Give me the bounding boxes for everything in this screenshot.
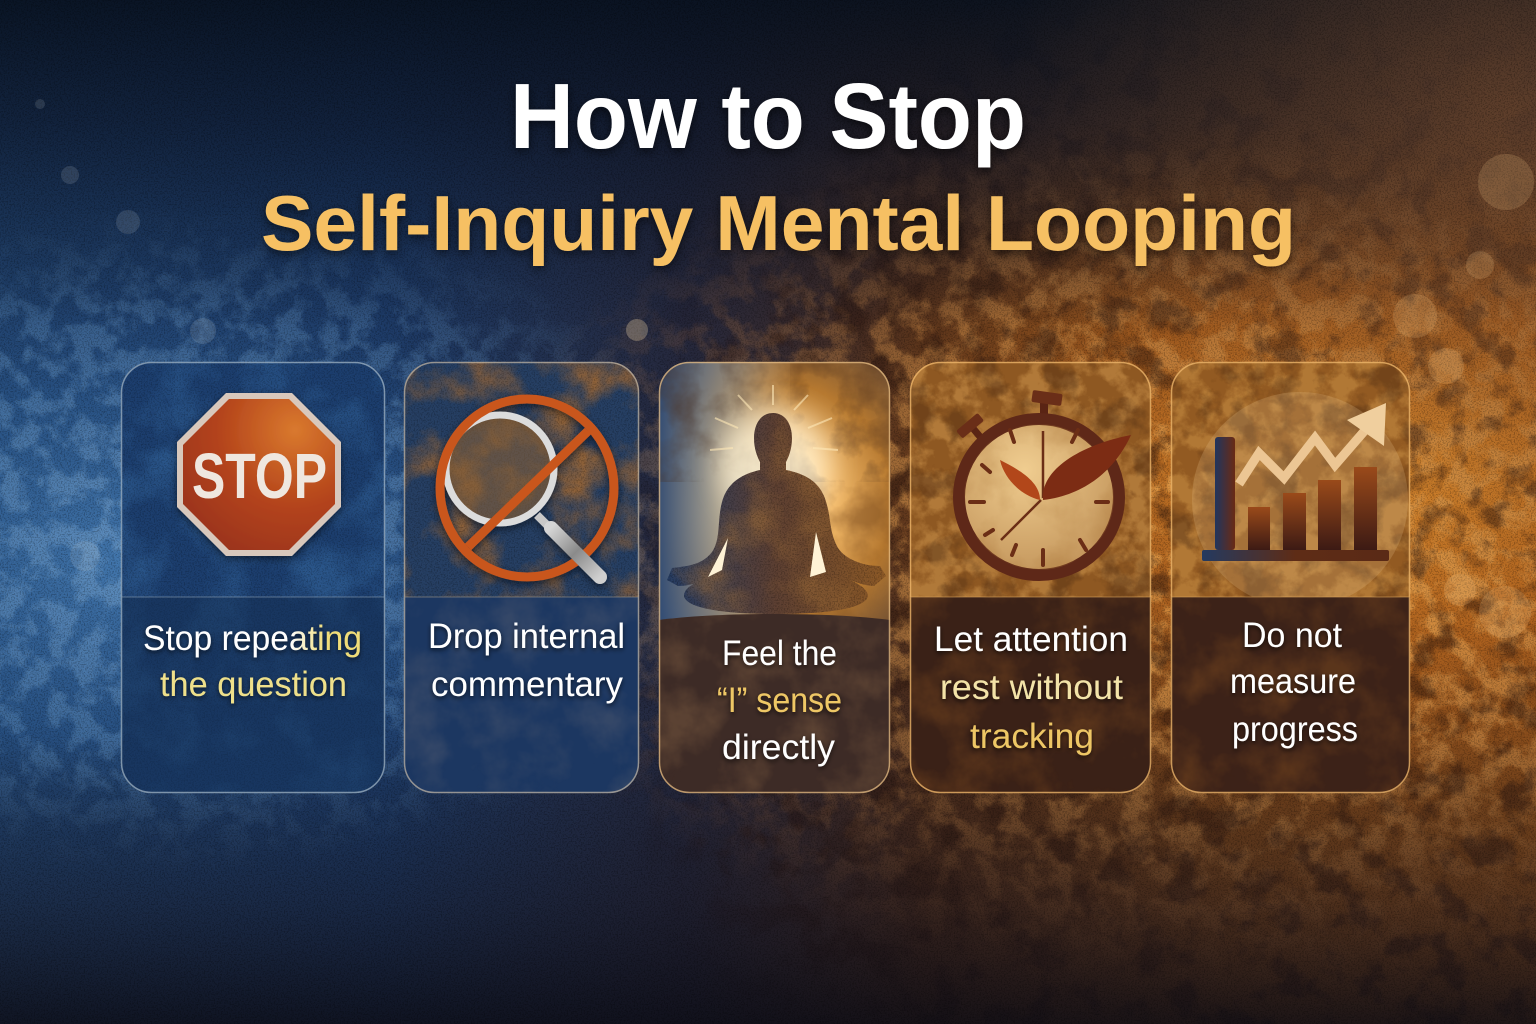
caption: feel the I sense directly: “I” sense xyxy=(717,681,842,720)
title xyxy=(261,64,1296,267)
caption: stop repeating the question: the question xyxy=(160,665,347,704)
caption: do not measure progress: Do not xyxy=(1242,616,1342,655)
caption: let attention rest without tracking: Let attention xyxy=(934,620,1128,659)
icon: crossed-out magnifying glass xyxy=(440,399,614,577)
caption: stop repeating the question xyxy=(143,619,362,704)
icon: meditating figure with rays xyxy=(660,385,890,620)
caption: let attention rest without tracking xyxy=(934,620,1128,756)
icon: stop sign xyxy=(177,393,341,556)
panel: do not measure progress xyxy=(1171,362,1410,793)
icon: stopwatch xyxy=(956,390,1131,575)
caption: feel the I sense directly: Feel the xyxy=(722,634,837,673)
caption: do not measure progress: progress xyxy=(1232,710,1358,749)
title line 1: How to Stop xyxy=(510,64,1026,168)
caption: stop repeating the question: Stop repeating xyxy=(143,619,362,658)
panel: drop internal commentary xyxy=(404,362,639,793)
caption: let attention rest without tracking: rest without xyxy=(940,668,1123,707)
caption: feel the I sense directly xyxy=(717,634,842,767)
stop sign label: STOP xyxy=(192,440,327,512)
title line 2: Self-Inquiry Mental Looping xyxy=(261,179,1296,267)
caption: drop internal commentary: Drop internal xyxy=(428,617,625,656)
ground and caption panel xyxy=(659,614,890,793)
panel: stop repeating xyxy=(121,362,385,793)
caption: do not measure progress: measure xyxy=(1230,662,1356,701)
icon: bar chart with rising arrow xyxy=(1202,403,1389,561)
panel: feel the I sense xyxy=(659,362,890,793)
caption: drop internal commentary: commentary xyxy=(431,665,623,704)
panel: let attention rest xyxy=(910,362,1151,793)
caption: let attention rest without tracking: tracking xyxy=(970,717,1094,756)
clock hands xyxy=(1000,431,1131,540)
caption: feel the I sense directly: directly xyxy=(722,728,835,767)
caption: do not measure progress xyxy=(1230,616,1358,749)
caption: drop internal commentary xyxy=(428,617,625,704)
